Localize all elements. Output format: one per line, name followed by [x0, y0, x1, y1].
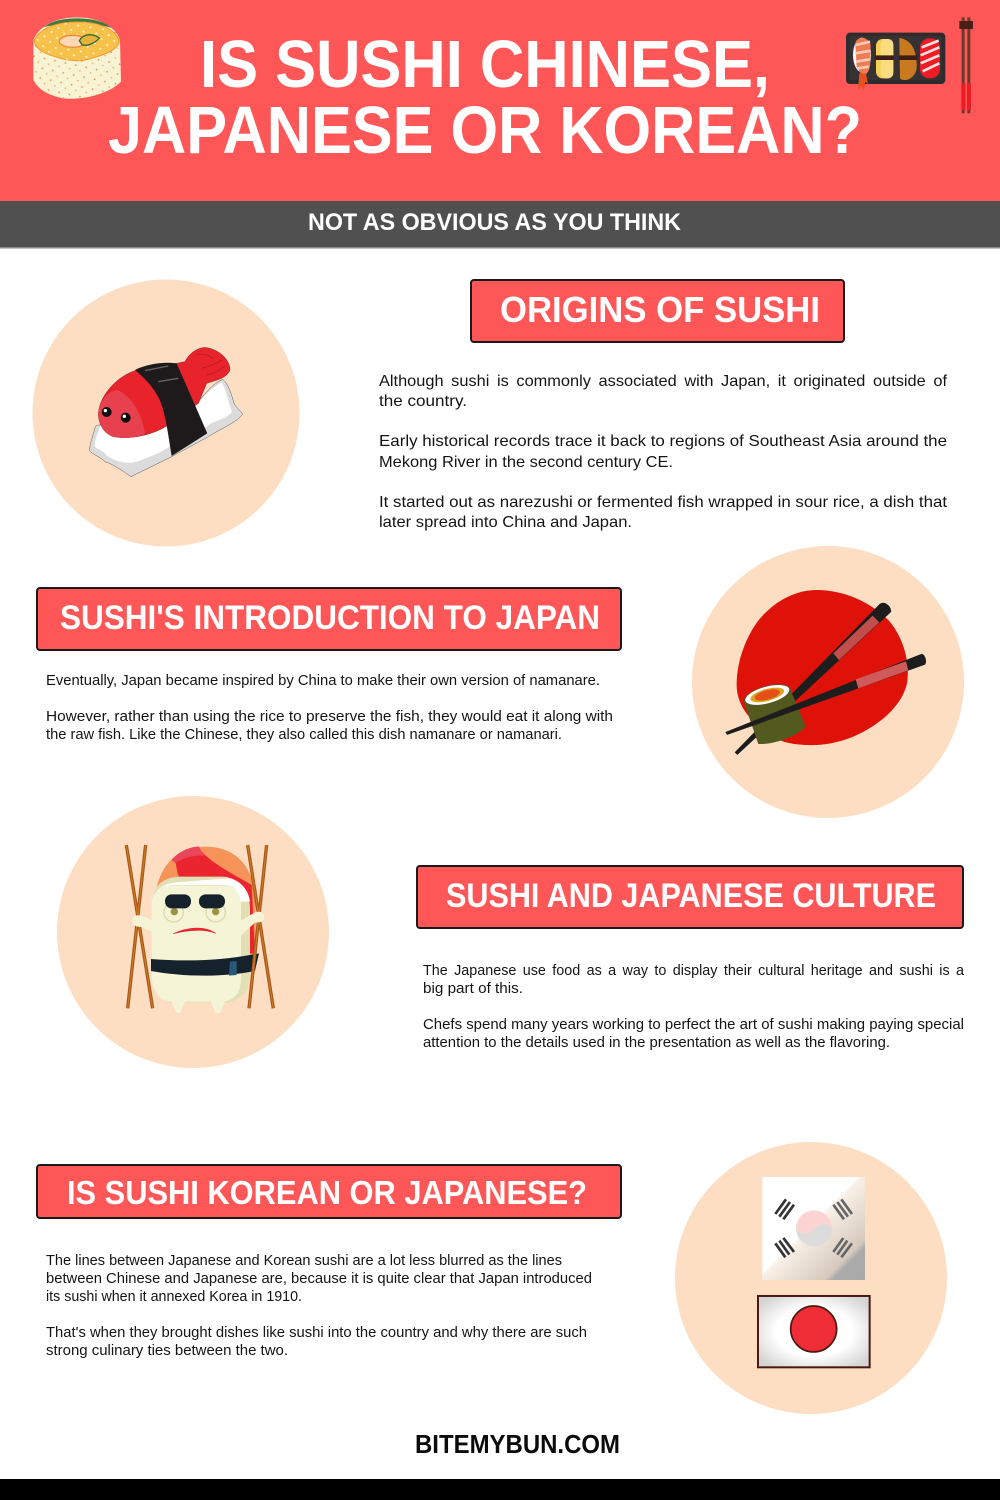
panel: sushi and Japanese culture: [57, 796, 965, 1068]
text block: attention to the details used in the presentation as well as the flavoring.: [423, 1034, 890, 1051]
text block: The Japanese use food as a way to display their cultural heritage and sushi is a: [423, 962, 965, 979]
text block: [379, 373, 948, 531]
text block: However, rather than using the rice to preserve the fish, they would eat it along with: [46, 708, 613, 725]
text block: between Chinese and Japanese are, because it is quite clear that Japan introduced: [46, 1270, 592, 1287]
chopsticks: [959, 17, 973, 113]
header banner: [0, 0, 1000, 201]
title: JAPANESE OR KOREAN?: [108, 93, 862, 168]
text block: [46, 672, 613, 743]
text block: It started out as narezushi or fermented fish wrapped in sour rice, a dish that: [379, 494, 948, 511]
heading: ORIGINS OF SUSHI: [500, 289, 820, 330]
text block: Eventually, Japan became inspired by China to make their own version of namanare.: [46, 672, 600, 689]
text block: That's when they brought dishes like sushi into the country and why there are such: [46, 1324, 587, 1341]
panel: is sushi Korean or Japanese: [37, 1142, 947, 1414]
subtitle band: NOT AS OBVIOUS AS YOU THINK: [308, 209, 682, 236]
illustration: fish nigiri in circle: [32, 280, 300, 546]
text block: [423, 962, 965, 1051]
text block: strong culinary ties between the two.: [46, 1342, 288, 1359]
text block: the raw fish. Like the Chinese, they also called this dish namanare or namanari.: [46, 726, 562, 743]
tuna nigiri: [920, 38, 940, 78]
panel: sushi's introduction to Japan: [37, 546, 964, 818]
heading: SUSHI AND JAPANESE CULTURE: [446, 877, 936, 915]
footer bar: [0, 1479, 1000, 1500]
heading: [37, 588, 621, 650]
text block: big part of this.: [423, 980, 523, 997]
text block: [46, 1252, 592, 1359]
illustration: Korean and Japanese flags: [675, 1142, 947, 1414]
text block: later spread into China and Japan.: [379, 514, 632, 531]
icon: South Korean flag: [762, 1177, 865, 1280]
icon: sushi roll: [33, 17, 121, 99]
illustration: maki roll and chopsticks on red sun: [692, 546, 964, 818]
subtitle band: [0, 201, 1000, 248]
title: [108, 27, 862, 168]
illustration: sushi character with chopsticks: [57, 796, 329, 1068]
tray: [846, 33, 945, 84]
panel: origins of sushi: [32, 280, 948, 546]
text block: Although sushi is commonly associated with Japan, it originated outside of: [379, 373, 948, 390]
text block: its sushi when it annexed Korea in 1910.: [46, 1288, 302, 1305]
text block: Early historical records trace it back to regions of Southeast Asia around the: [379, 433, 947, 450]
text block: Chefs spend many years working to perfect the art of sushi making paying special: [423, 1016, 964, 1033]
website credit: BITEMYBUN.COM: [415, 1429, 620, 1459]
icon: sushi tray and chopsticks: [846, 17, 973, 113]
heading: [37, 1165, 621, 1218]
text block: the country.: [379, 393, 467, 410]
icon: Japanese flag: [758, 1296, 870, 1367]
shrimp nigiri: [853, 38, 871, 91]
heading: [471, 280, 844, 342]
tamago nigiri: [875, 39, 894, 78]
text block: Mekong River in the second century CE.: [379, 454, 673, 471]
heading: [417, 866, 963, 928]
eel nigiri: [899, 38, 917, 80]
heading: SUSHI'S INTRODUCTION TO JAPAN: [60, 599, 600, 637]
heading: IS SUSHI KOREAN OR JAPANESE?: [67, 1174, 587, 1211]
text block: The lines between Japanese and Korean sushi are a lot less blurred as the lines: [46, 1252, 562, 1269]
title: IS SUSHI CHINESE,: [200, 27, 770, 102]
